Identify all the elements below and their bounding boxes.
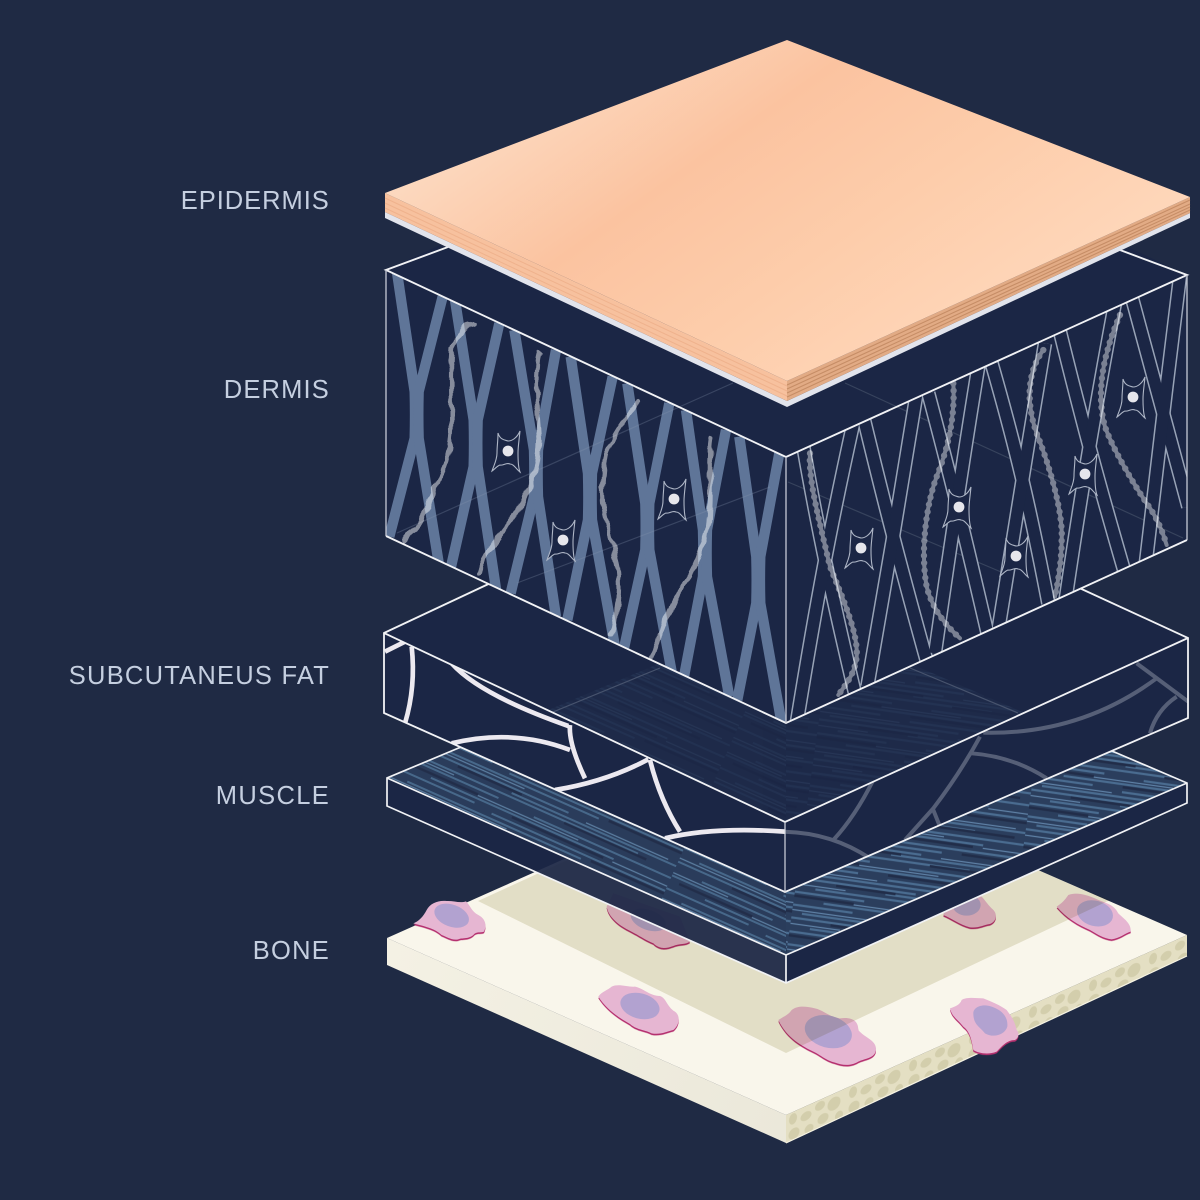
- panel: epidermis layer: [385, 40, 1190, 407]
- cell 4: [778, 1007, 876, 1065]
- fat right face: [785, 638, 1188, 892]
- epidermis left side: [385, 193, 787, 401]
- dermis left face: [386, 270, 786, 723]
- epidermis base light edge: [385, 212, 1190, 407]
- dermis right face: [786, 275, 1187, 722]
- fat top face: [384, 455, 1188, 822]
- cell 7: [1057, 894, 1131, 939]
- fibroblast cells right: [845, 377, 1145, 577]
- muscle left face: [387, 778, 786, 983]
- cell 2: [607, 893, 690, 948]
- dermis right collagen outline bands: [797, 277, 1188, 723]
- faint fibers through fat top: [550, 664, 1022, 820]
- label: muscle: MUSCLE: [216, 782, 329, 810]
- dermis right elastin fibers: [810, 315, 1167, 695]
- dermis right faint lines: [788, 383, 1183, 577]
- fat top faint edge lines: [497, 668, 1018, 735]
- shadow of muscle on bone: [478, 760, 1110, 1053]
- bone left side: [387, 938, 786, 1143]
- panel: muscle layer: [387, 610, 1187, 983]
- dermis left elastin fibers: [405, 323, 712, 657]
- epidermis right strata: [787, 200, 1190, 397]
- muscle outlines: [387, 747, 1187, 983]
- bone right side spongy: [786, 935, 1187, 1143]
- epidermis left strata: [385, 198, 787, 396]
- panel: bone layer: [387, 760, 1187, 1143]
- cell 1: [413, 899, 485, 940]
- panel: dermis layer: [384, 246, 1190, 724]
- dermis left faint lines: [397, 383, 770, 583]
- bone top face: [387, 760, 1187, 1115]
- fat right bands: [780, 663, 1188, 858]
- cell 3: [598, 985, 679, 1034]
- epidermis top face: [385, 40, 1190, 381]
- cell 5: [950, 998, 1018, 1053]
- muscle right face: [786, 783, 1187, 983]
- fat outlines: [384, 580, 1188, 892]
- panel: subcutaneous fat layer: [383, 584, 1189, 893]
- label: bone: BONE: [253, 937, 329, 965]
- label: epidermis: EPIDERMIS: [181, 187, 329, 215]
- label: subcutaneus fat: SUBCUTANEUS FAT: [69, 662, 329, 690]
- fat left face: [384, 633, 785, 892]
- cell 6: [943, 890, 996, 928]
- muscle top face left fibers: [387, 610, 786, 955]
- label: dermis: DERMIS: [224, 376, 329, 404]
- dermis outlines: [386, 247, 1187, 723]
- dermis left collagen bands: [389, 270, 782, 723]
- dermis top face: [386, 85, 1187, 457]
- muscle top face right fibers: [786, 610, 1187, 955]
- fibroblast cells left: [492, 431, 686, 561]
- epidermis right side: [787, 197, 1190, 401]
- fat left bands: [385, 642, 785, 838]
